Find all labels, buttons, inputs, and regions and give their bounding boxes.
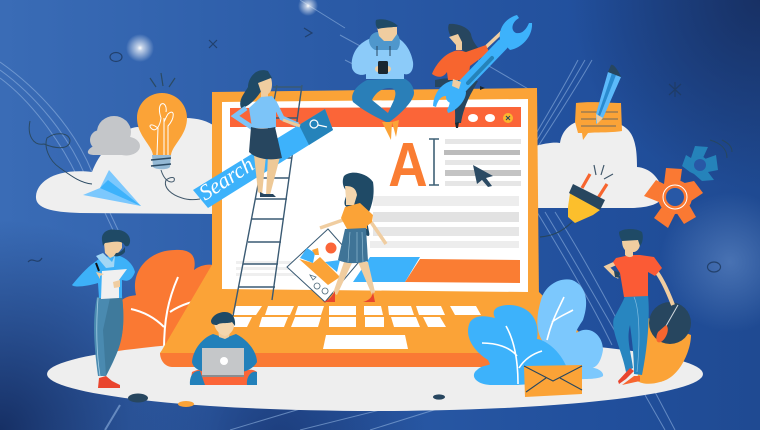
legs [352, 78, 414, 123]
search bar [193, 109, 333, 208]
legs [254, 155, 280, 195]
content lines [236, 196, 519, 276]
shirt [341, 203, 373, 229]
woman with wrench [432, 15, 532, 128]
cloud: right [532, 120, 663, 208]
face [449, 34, 462, 50]
banner [353, 257, 520, 283]
space bar [323, 335, 408, 349]
search button [299, 109, 333, 145]
woman on ladder [235, 70, 300, 197]
legs [333, 262, 375, 295]
shoes [323, 291, 375, 302]
ground platform [47, 337, 703, 411]
cloud: left [36, 118, 216, 214]
skirt [338, 228, 368, 263]
arrow cursor [473, 165, 493, 187]
face [622, 238, 640, 257]
window buttons [468, 113, 513, 123]
cord [161, 170, 200, 200]
browser bar [230, 107, 521, 127]
hoodie [352, 36, 413, 79]
wrench [433, 15, 532, 113]
shirt [72, 255, 135, 298]
face [104, 238, 122, 258]
note bubble [575, 102, 622, 140]
collar [96, 253, 115, 268]
magnifier icon [310, 120, 327, 128]
man standing right with mouse [607, 229, 691, 385]
laptop front edge [160, 353, 490, 367]
screen [222, 99, 528, 292]
pants [613, 295, 649, 375]
man on top [352, 19, 414, 140]
envelope [524, 365, 582, 397]
light bulb [137, 73, 200, 200]
hoodie strings [377, 46, 390, 56]
plant: blue [468, 305, 570, 385]
paper plane and doodle line [29, 121, 141, 206]
hair [619, 229, 643, 246]
shoes [618, 368, 634, 384]
mouse body [636, 318, 691, 384]
man sitting with laptop [190, 312, 257, 385]
gear: blue [682, 140, 732, 181]
hair [376, 19, 398, 29]
hands and pen [96, 272, 120, 288]
hair [343, 173, 374, 236]
hand on wrench [452, 79, 461, 89]
plug [540, 165, 613, 237]
hair [211, 312, 235, 326]
plant: light blue [537, 279, 603, 379]
skirt [249, 127, 282, 159]
pants [435, 78, 478, 123]
hood [369, 32, 400, 50]
shoe [98, 376, 120, 388]
arms [235, 102, 298, 128]
face [345, 186, 357, 205]
arm [486, 32, 502, 47]
top [432, 45, 489, 80]
face [214, 319, 234, 336]
plant: orange [117, 250, 216, 353]
hair [448, 24, 482, 58]
mouse cord [666, 305, 678, 326]
laptop [160, 88, 600, 367]
sweater [192, 334, 257, 372]
hands and phone [375, 61, 391, 74]
search label: Search [194, 151, 258, 205]
laptop [202, 348, 244, 377]
arms [607, 263, 619, 277]
neck [218, 328, 231, 339]
laptop base [160, 263, 600, 353]
pants [94, 295, 123, 376]
letter A: A [388, 131, 428, 200]
cloud: grey [88, 116, 140, 156]
arms [320, 220, 386, 244]
gear: orange [644, 168, 703, 228]
pencil [596, 65, 621, 124]
keyboard keys [230, 306, 481, 349]
mouse top [649, 302, 691, 344]
picture card [287, 229, 358, 302]
ground pebbles [128, 394, 445, 407]
blouse [249, 96, 276, 128]
woman centre [287, 173, 386, 302]
legs [190, 370, 257, 385]
text lines top [444, 139, 521, 186]
hair [240, 70, 272, 108]
ladder [233, 85, 302, 316]
rays [150, 73, 175, 87]
man standing left [72, 229, 135, 388]
shoes [382, 120, 399, 140]
text cursor [429, 139, 439, 185]
paper [101, 269, 127, 299]
shirt [613, 255, 662, 297]
face [377, 27, 397, 41]
hair and beard [102, 229, 130, 256]
laptop screen frame [212, 88, 539, 300]
head [258, 78, 272, 100]
